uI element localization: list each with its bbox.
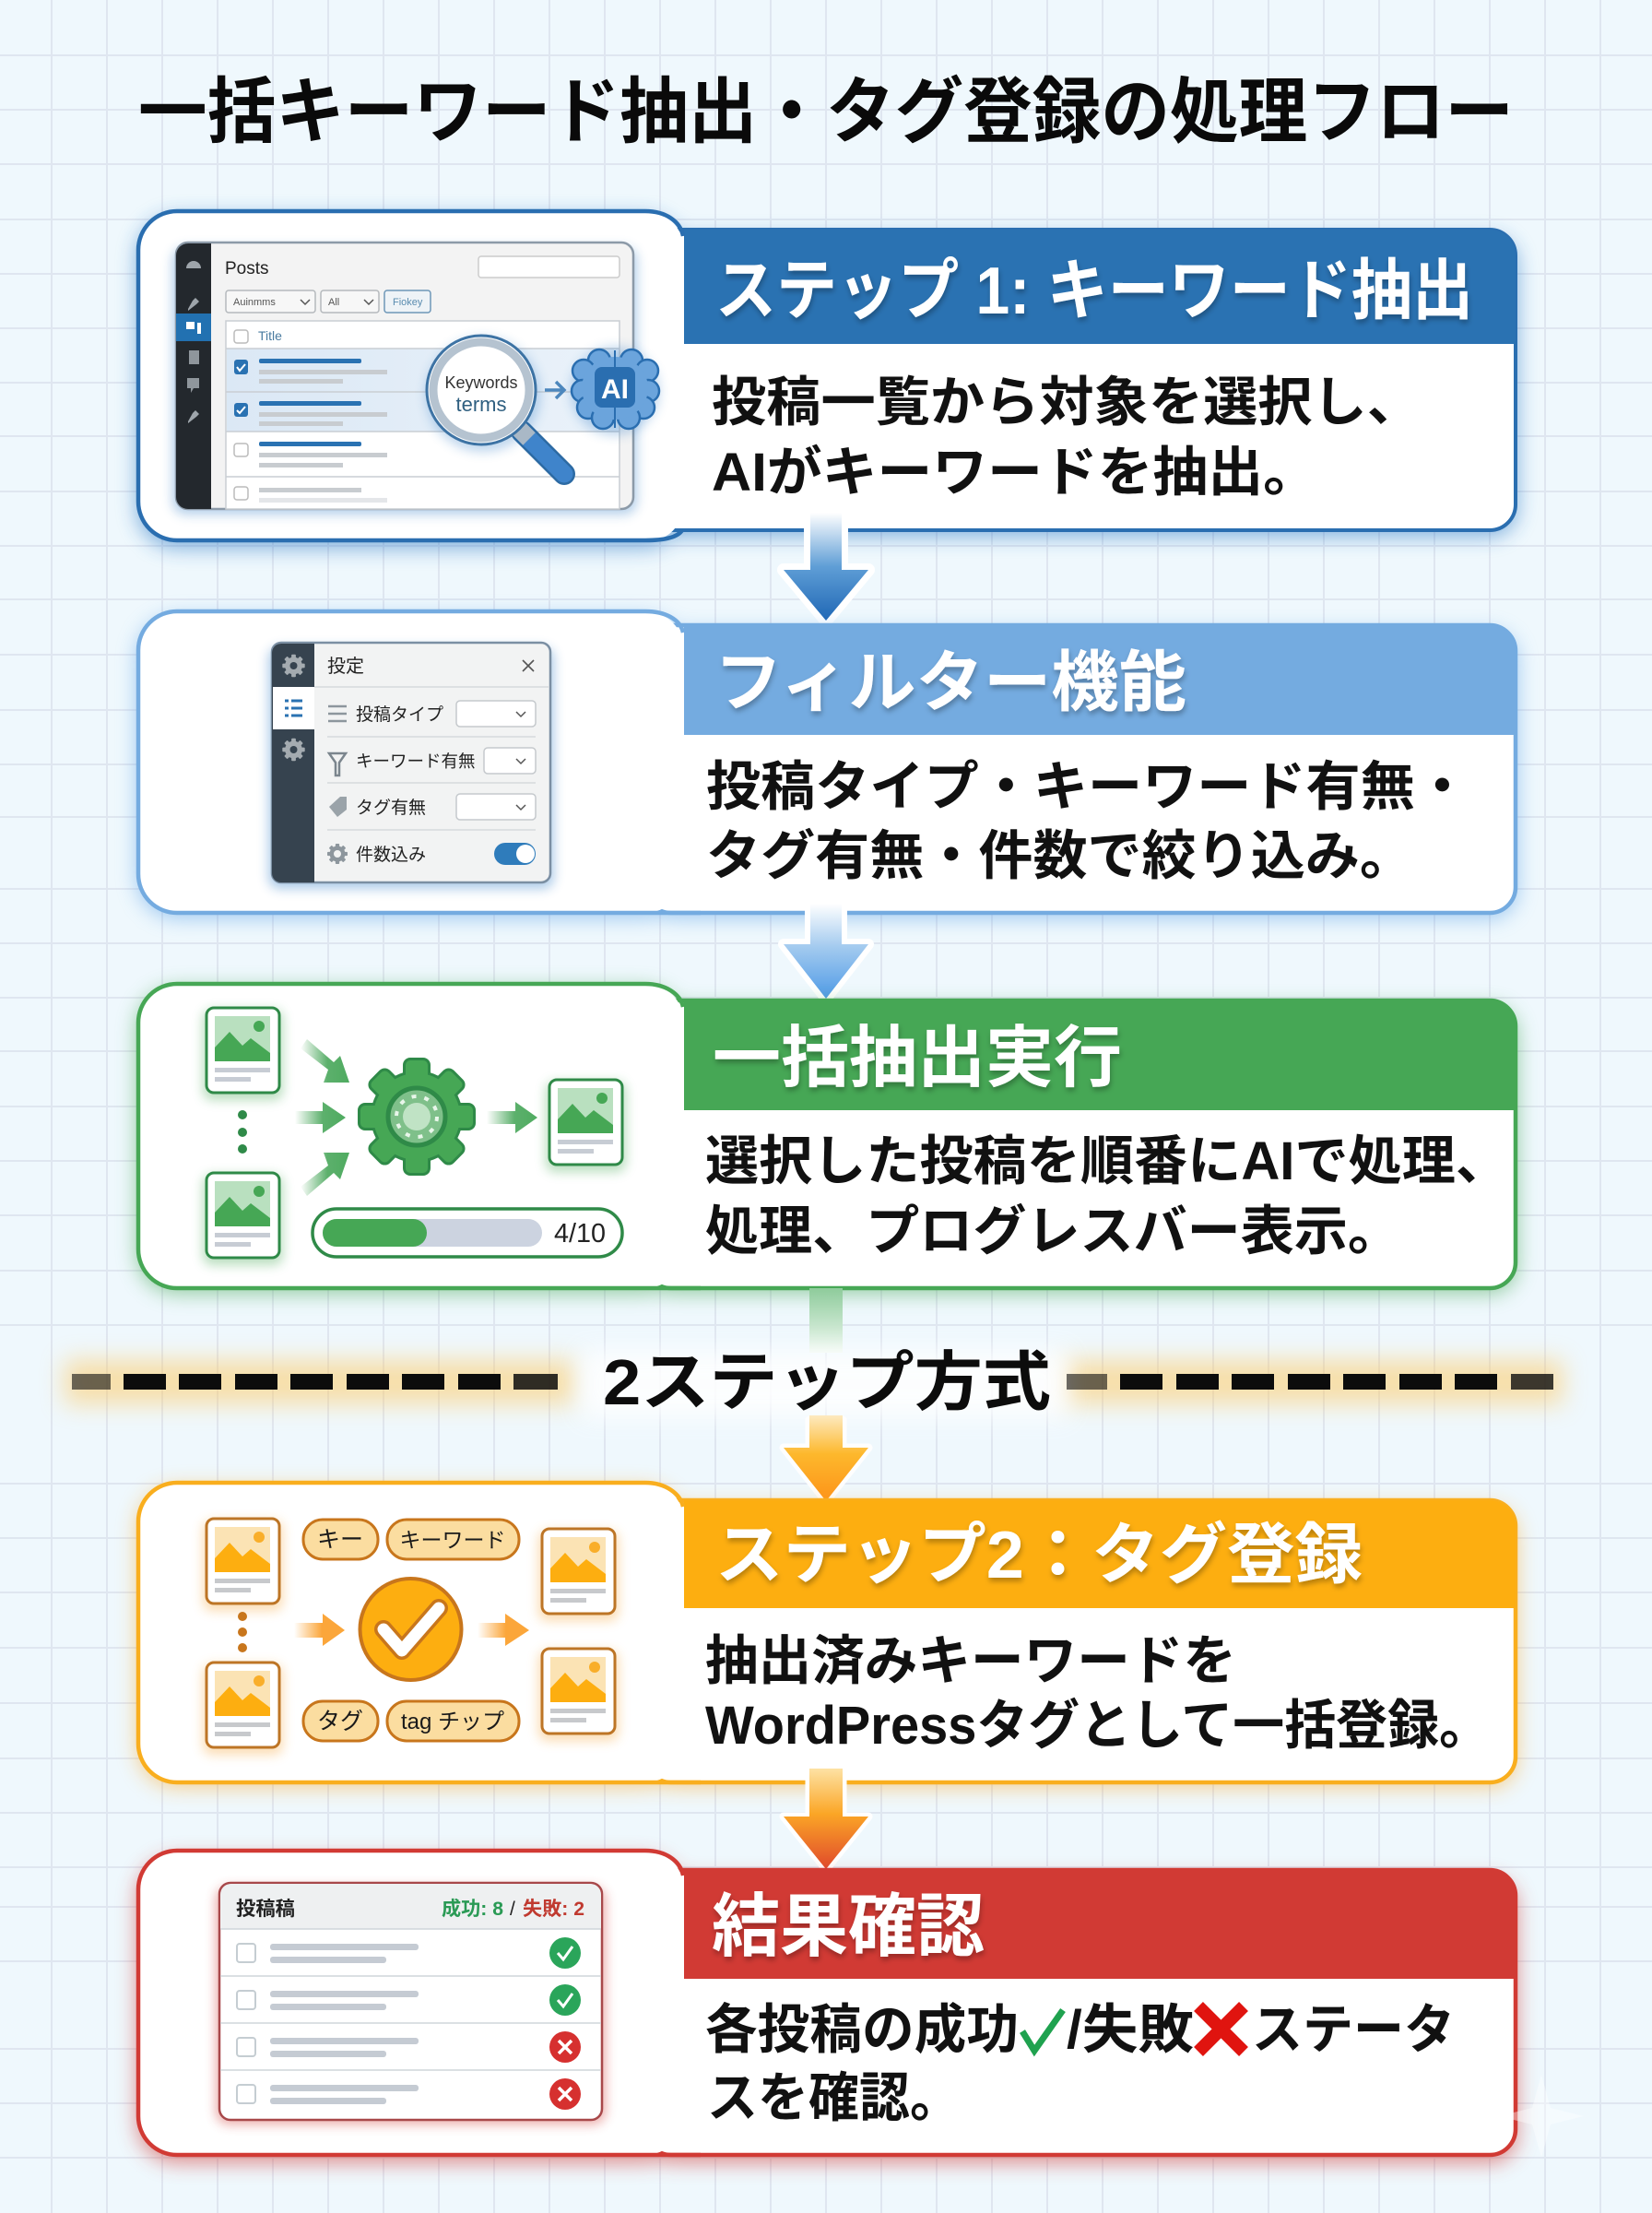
text: filter description: タグ有無・件数で絞り込み。 <box>706 826 1414 886</box>
panel: batch extraction <box>136 984 1517 1294</box>
illustration: result table: 投稿稿 <box>236 1899 295 1920</box>
icon: AI brain: AI <box>601 374 629 405</box>
illustration: settings panel: キーワード有無 <box>356 751 476 771</box>
icon: check circle <box>360 1579 461 1680</box>
chips: keywords and tags: キー <box>317 1527 363 1553</box>
text: result description: スを確認。 <box>707 2068 961 2128</box>
text: step 1 description <box>712 373 1422 503</box>
illustration: tag registration <box>203 1519 619 1755</box>
illustration: posts list with magnifier and AI brain: All <box>328 297 339 308</box>
heading: result: 結果確認 <box>712 1888 985 1965</box>
text: step 2 description: WordPressタグとして一括登録。 <box>705 1696 1491 1756</box>
illustration: batch processing <box>203 1008 626 1265</box>
arrow: filter to batch <box>784 904 868 999</box>
illustration: result table: 成功: 8 <box>442 1898 503 1920</box>
text: step 2 description: 抽出済みキーワードを <box>705 1631 1236 1691</box>
icon: green check <box>1022 2010 1063 2051</box>
chips: keywords and tags <box>303 1520 519 1741</box>
illustration: settings panel: 投稿タイプ <box>356 704 443 725</box>
panel: step 1 keyword extraction <box>136 211 1517 549</box>
panel: result check <box>136 1851 1517 2163</box>
illustration: posts list with magnifier and AI brain <box>172 243 659 515</box>
chips: keywords and tags: tag チップ <box>401 1710 504 1734</box>
illustration: posts list with magnifier and AI brain: Posts <box>225 259 269 278</box>
title: 一括キーワード抽出・タグ登録の処理フロー <box>138 71 1514 152</box>
icon: red cross <box>1198 2006 1244 2052</box>
illustration: result table <box>216 1883 606 2124</box>
illustration: posts list with magnifier and AI brain: Auinmms <box>233 297 276 308</box>
text: batch description: 選択した投稿を順番にAIで処理、 <box>705 1131 1509 1191</box>
text: result description: 各投稿の成功 <box>705 2000 1019 2060</box>
illustration: settings panel <box>268 643 554 889</box>
text: filter description: 投稿タイプ・キーワード有無・ <box>706 757 1469 817</box>
divider: two-step method <box>65 1346 1563 1418</box>
arrow: green stem to divider <box>809 1288 843 1353</box>
icons: status markers <box>549 1937 581 2110</box>
chips: keywords and tags: タグ <box>317 1709 363 1734</box>
heading: two-step: 2ステップ方式 <box>603 1346 1051 1418</box>
illustration: posts list with magnifier and AI brain: Fiokey <box>393 297 423 308</box>
arrow: step 1 to filter <box>784 513 868 621</box>
progress bar <box>313 1209 622 1257</box>
panel: step 2 tag registration <box>136 1483 1517 1788</box>
illustration: settings panel: 件数込み <box>356 845 426 865</box>
arrow: divider to step 2 <box>784 1415 868 1501</box>
panel: filter function <box>136 611 1517 918</box>
text: batch description <box>705 1131 1509 1261</box>
illustration: result table: / <box>510 1899 515 1920</box>
text: result description: /失敗 <box>1067 2000 1194 2060</box>
progress bar: 4/10 <box>554 1219 606 1249</box>
illustration: settings panel: 投定 <box>327 656 364 677</box>
chips: keywords and tags: キーワード <box>400 1528 505 1552</box>
icon: gear <box>360 1060 473 1173</box>
illustration: posts list with magnifier and AI brain: Title <box>258 328 282 343</box>
text: filter description <box>706 757 1469 886</box>
icon: magnifier with keywords <box>426 336 564 474</box>
illustration: settings panel: タグ有無 <box>356 798 426 818</box>
text: result description <box>705 2000 1455 2128</box>
sparkle <box>1499 2075 1584 2158</box>
illustration: result table: 失敗: 2 <box>523 1899 584 1920</box>
heading: step 2: ステップ2：タグ登録 <box>715 1519 1363 1592</box>
arrow: step 2 to result <box>784 1769 868 1869</box>
text: batch description: 処理、プログレスバー表示。 <box>705 1201 1401 1261</box>
text: step 1 description: 投稿一覧から対象を選択し、 <box>712 373 1422 432</box>
arrow: keywords to AI <box>545 382 564 398</box>
text: step 1 description: AIがキーワードを抽出。 <box>712 443 1318 503</box>
icon: magnifier with keywords: Keywords <box>444 373 518 392</box>
text: step 2 description <box>705 1631 1491 1756</box>
heading: batch: 一括抽出実行 <box>713 1021 1122 1095</box>
icon: AI brain <box>571 347 659 435</box>
heading: step 1: ステップ 1: キーワード抽出 <box>715 254 1473 328</box>
icon: magnifier with keywords: terms <box>455 393 507 416</box>
heading: filter: フィルター機能 <box>714 646 1186 720</box>
text: result description: ステータ <box>1252 2000 1455 2060</box>
